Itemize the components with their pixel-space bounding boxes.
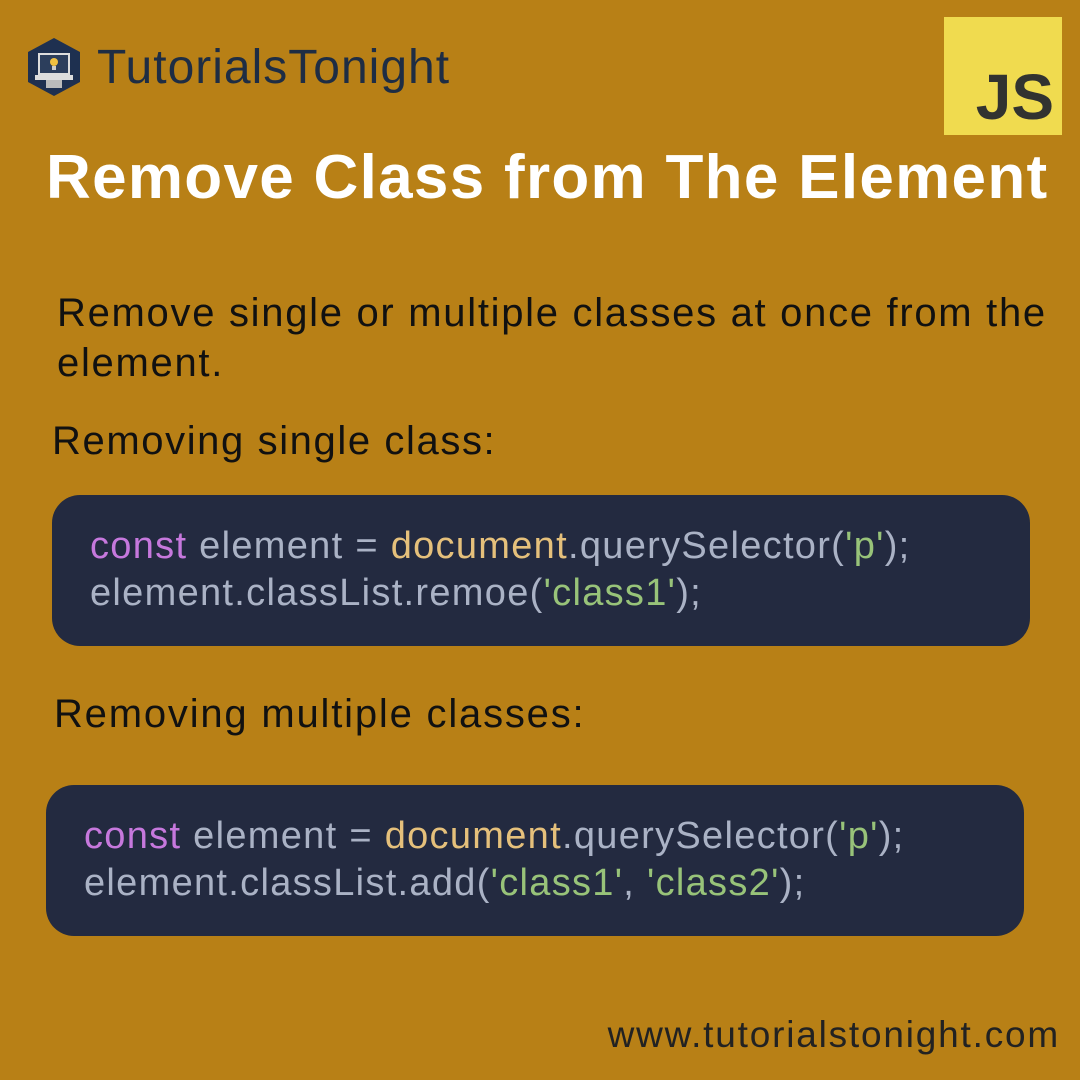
- code block: single: element.classList.remoe('class1');: [90, 572, 702, 614]
- heading: multiple classes: Removing multiple classes:: [54, 692, 585, 736]
- code block: multiple: const element = document.querySelector('p');: [84, 815, 904, 857]
- logo: [28, 38, 450, 96]
- description: element.: [57, 341, 224, 385]
- brand name: TutorialsTonight: [97, 41, 450, 94]
- footer url: www.tutorialstonight.com: [608, 1014, 1060, 1055]
- icon: JS badge: [944, 17, 1062, 135]
- code block: single: const element = document.querySelector('p');: [90, 525, 910, 567]
- code block: multiple: [46, 785, 1024, 936]
- heading: single class: Removing single class:: [52, 419, 496, 463]
- code block: single: [52, 495, 1030, 646]
- description: [57, 291, 1047, 385]
- icon: JS badge: JS: [976, 61, 1054, 133]
- icon: hexagon laptop: [28, 38, 80, 96]
- code block: multiple: element.classList.add('class1', 'class2');: [84, 862, 805, 904]
- description: Remove single or multiple classes at once from the: [57, 291, 1047, 335]
- title: Remove Class from The Element: [46, 143, 1048, 212]
